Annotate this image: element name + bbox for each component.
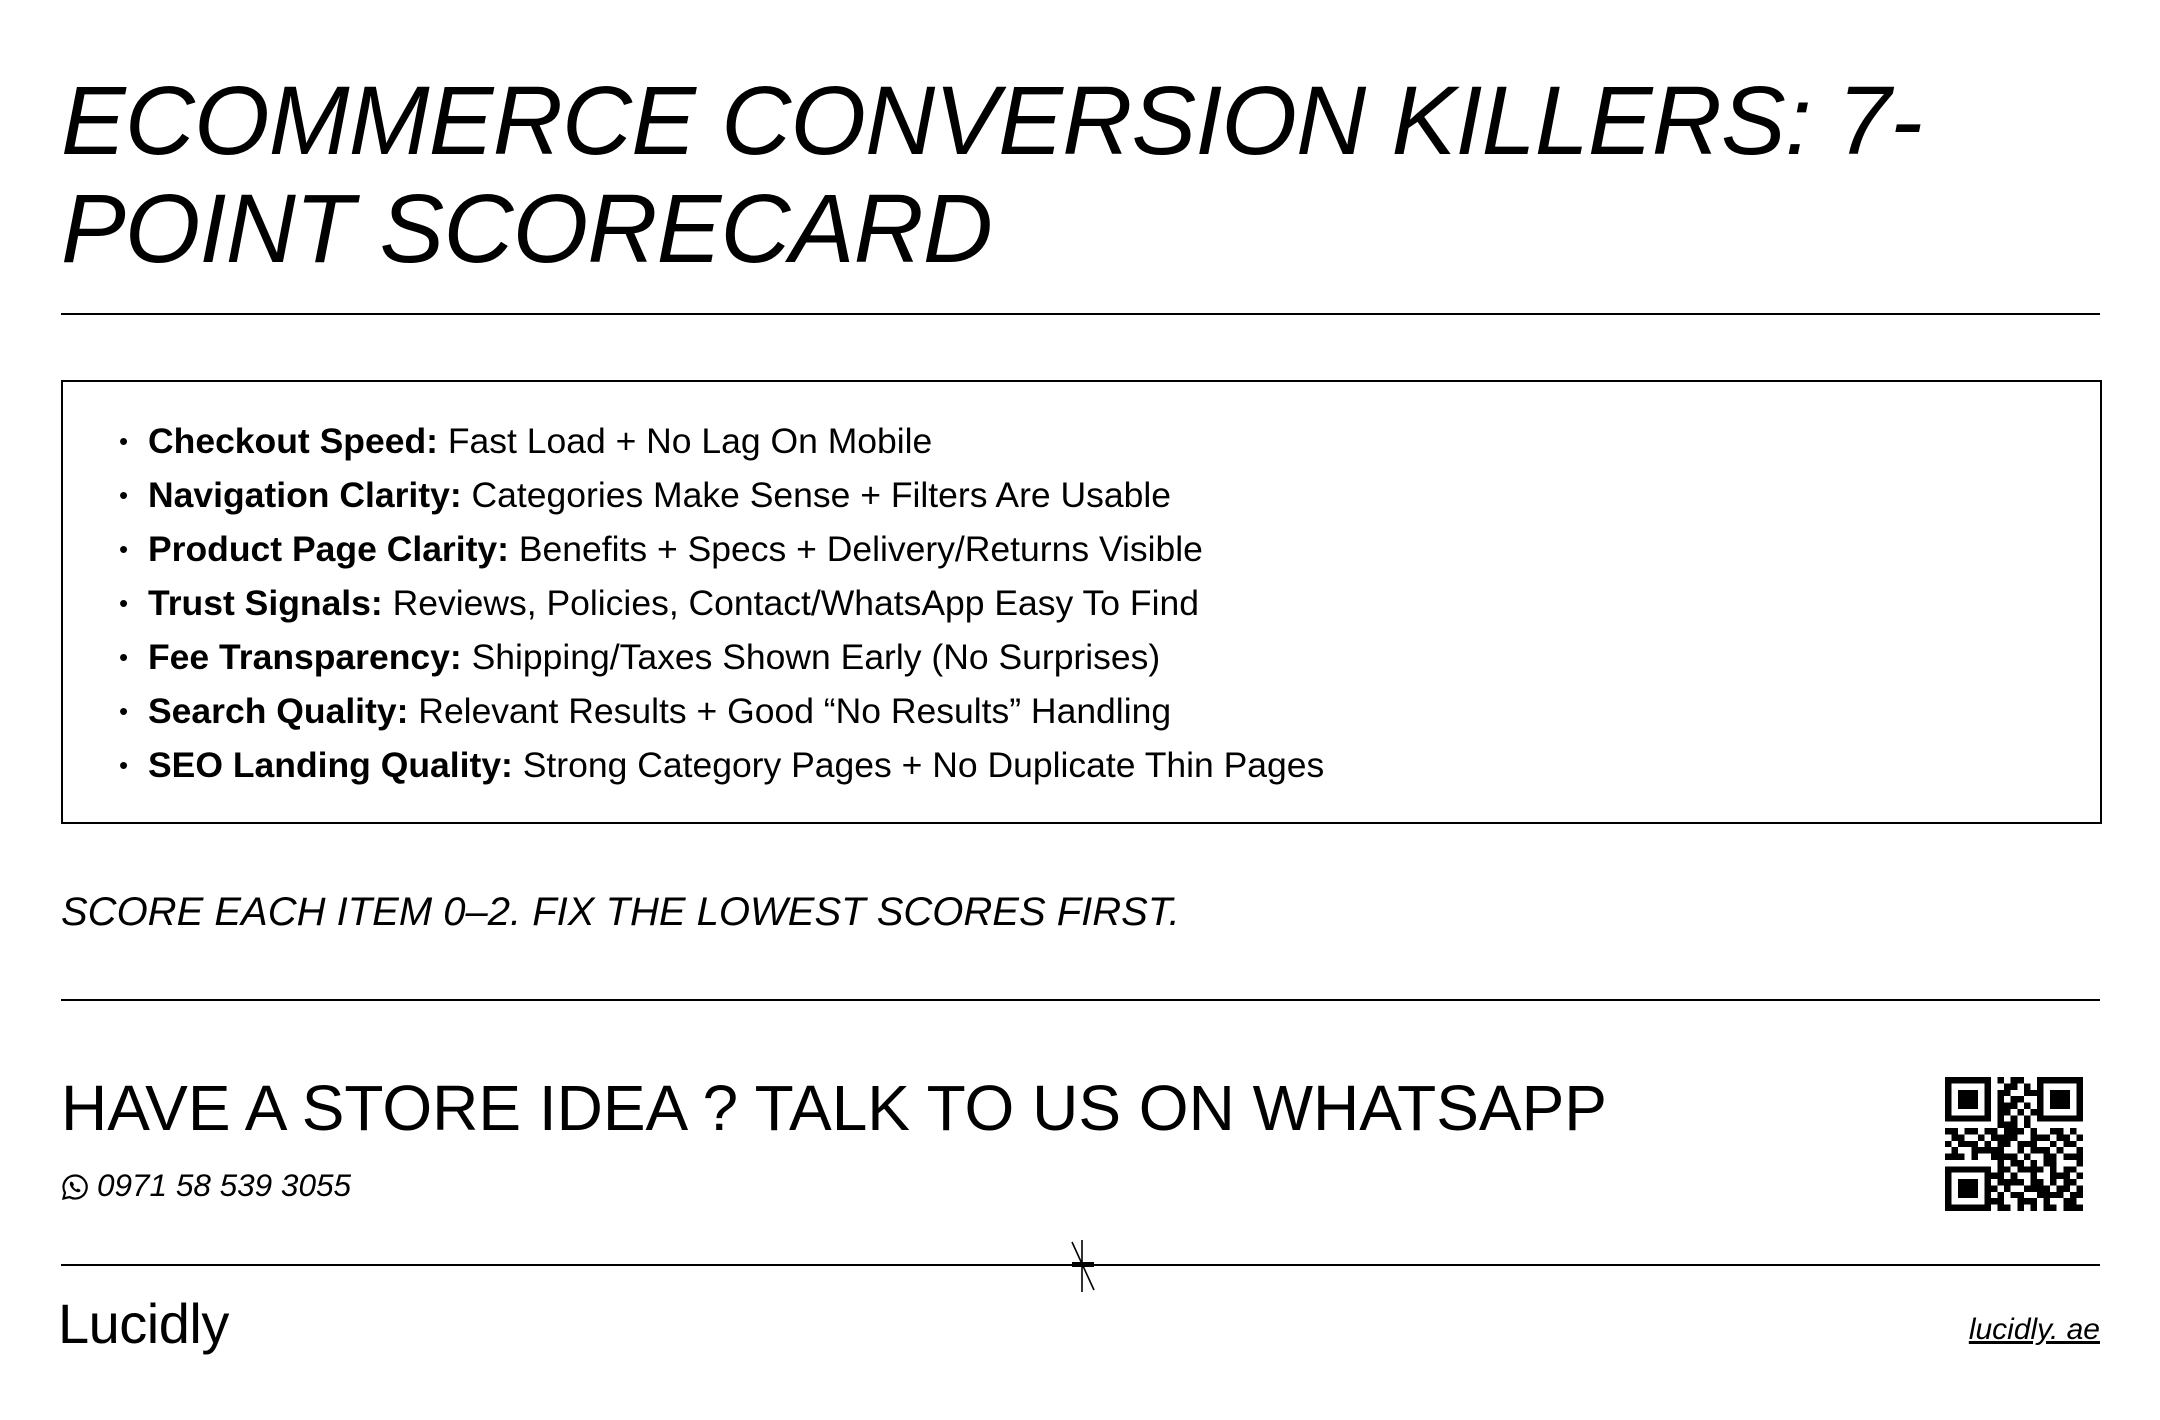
checklist items: SEO Landing Quality: Strong Category Pages + No Duplicate Thin Pages [148,745,1324,785]
icon: crosshair mark [1071,1240,1095,1292]
checklist items: Checkout Speed: Fast Load + No Lag On Mobile [148,421,932,461]
title: ECOMMERCE CONVERSION KILLERS: 7- [61,66,1922,175]
checklist items: Search Quality: Relevant Results + Good “No Results” Handling [148,691,1171,731]
checklist items: Product Page Clarity: Benefits + Specs + Delivery/Returns Visible [148,529,1203,569]
checklist items: Fee Transparency: Shipping/Taxes Shown Early (No Surprises) [148,637,1160,677]
scoring instruction: SCORE EACH ITEM 0–2. FIX THE LOWEST SCORES FIRST. [61,890,1180,934]
checklist items [120,421,1324,785]
icon: whatsapp [62,1174,88,1200]
checklist items: Navigation Clarity: Categories Make Sense + Filters Are Usable [148,475,1171,515]
CTA heading: HAVE A STORE IDEA ? TALK TO US ON WHATSAPP [61,1072,1607,1144]
logo: Lucidly: Lucidly [58,1292,229,1355]
checklist items: Trust Signals: Reviews, Policies, Contact/WhatsApp Easy To Find [148,583,1199,623]
website link: lucidly. ae [1969,1313,2100,1346]
title [61,66,1922,283]
icon: QR code [1945,1077,2083,1211]
panel: scorecard list [61,380,2102,824]
title: POINT SCORECARD [61,174,992,283]
phone line: 0971 58 539 3055 [97,1167,351,1203]
